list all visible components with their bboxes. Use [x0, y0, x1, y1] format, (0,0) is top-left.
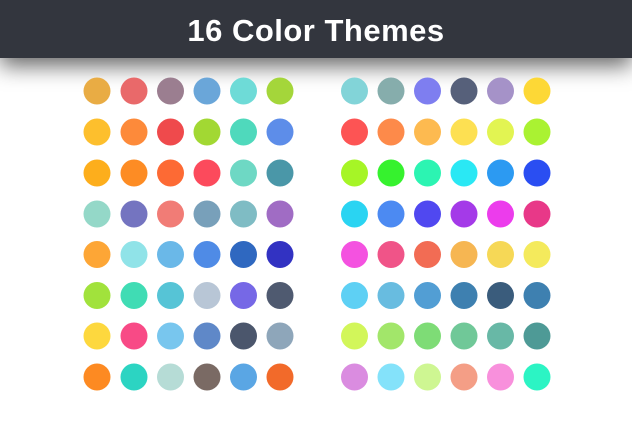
panel: left color grid: [84, 78, 294, 390]
title: 16 Color Themes: [187, 13, 445, 48]
header bar: [0, 0, 632, 58]
panel: right color grid: [341, 78, 550, 390]
